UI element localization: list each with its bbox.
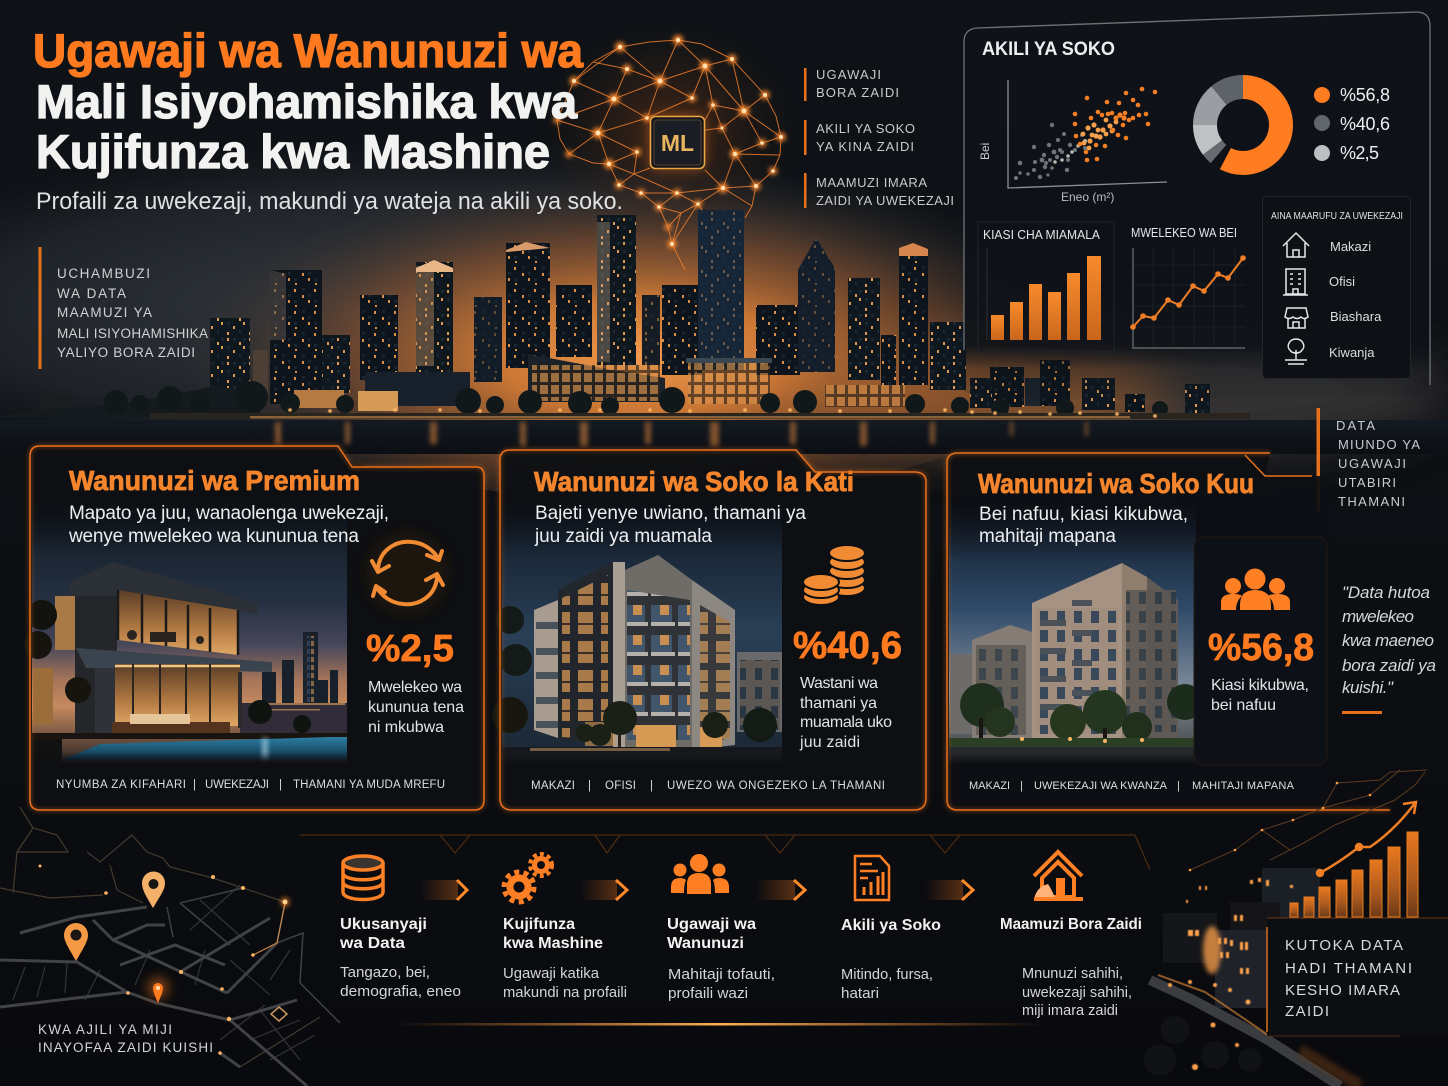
icon: database <box>343 856 383 900</box>
caption: liveable cities <box>38 1022 213 1055</box>
step: machine learning: Kujifunza <box>503 916 575 933</box>
process timeline <box>300 835 1150 1026</box>
panel: investment types: Ofisi <box>1329 274 1355 289</box>
panel: investment types: Kiwanja <box>1329 345 1375 360</box>
card tags <box>531 780 885 792</box>
icon: stacked coins <box>803 545 865 605</box>
callouts: top centre benefits: YA KINA ZAIDI <box>816 139 914 154</box>
card tags: OFISI <box>605 780 636 792</box>
low-rise waterfront buildings <box>294 354 905 411</box>
callout: left data analysis: UCHAMBUZI <box>57 266 150 281</box>
card heading: Wanunuzi wa Premium <box>69 465 360 496</box>
callouts: top centre benefits: UGAWAJI <box>816 67 881 82</box>
image: apartment building <box>492 505 782 764</box>
arrow <box>755 880 805 900</box>
icon: house <box>1034 852 1083 901</box>
step: machine learning: kwa Mashine <box>503 935 603 952</box>
water with reflections <box>0 408 1448 454</box>
quote: "Data hutoa <box>1342 583 1430 602</box>
step: better decisions: Mnunuzi sahihi, <box>1022 966 1123 982</box>
step: market intelligence: hatari <box>841 986 879 1002</box>
card tags: | <box>588 780 591 792</box>
stat description: thamani ya <box>800 695 877 712</box>
stat description: ni mkubwa <box>368 719 444 736</box>
subtitle: Profaili za uwekezaji, makundi ya wateja na akili ya soko. <box>36 188 623 215</box>
card tags <box>969 780 1295 792</box>
line chart: price trend: MWELEKEO WA BEI <box>1131 226 1237 240</box>
step: market intelligence: Mitindo, fursa, <box>841 967 933 983</box>
stat description: Mwelekeo wa <box>368 679 462 696</box>
image: luxury villa at dusk <box>24 505 347 764</box>
stat description: juu zaidi <box>799 734 860 751</box>
step: better decisions <box>1000 852 1142 1019</box>
title: Kujifunza kwa Mashine <box>36 125 550 178</box>
step: data collection <box>339 856 461 1000</box>
callout: left data analysis: MALI ISIYOHAMISHIKA <box>57 326 208 341</box>
callout: left data analysis <box>38 247 208 369</box>
icon: shop <box>1285 308 1308 328</box>
donut legend <box>1314 85 1390 163</box>
callout box: from data to value: ZAIDI <box>1285 1003 1329 1020</box>
icon: location pin <box>142 872 165 908</box>
callout: left data analysis: YALIYO BORA ZAIDI <box>57 345 195 360</box>
step: data collection: wa Data <box>339 935 405 952</box>
line chart: price trend <box>1130 226 1246 348</box>
icon: neural network brain <box>540 20 800 270</box>
icon: group of people <box>1221 568 1290 610</box>
panel: mid-market buyers <box>492 450 926 810</box>
card tags <box>56 779 445 791</box>
stat: %40,6 <box>793 625 902 667</box>
icon: office <box>1283 269 1308 295</box>
stat: %2,5 <box>366 628 454 670</box>
title: Ugawaji wa Wanunuzi wa <box>33 24 584 77</box>
card border <box>30 446 484 810</box>
icon: land plot <box>1285 339 1307 364</box>
panel: investment types <box>1262 196 1410 378</box>
arrow: growth trend <box>1317 802 1416 876</box>
callouts: top centre benefits: ZAIDI YA UWEKEZAJI <box>816 193 954 208</box>
donut chart <box>1205 87 1281 163</box>
card heading: Wanunuzi wa Soko Kuu <box>978 468 1254 499</box>
scatter chart <box>978 80 1167 204</box>
callout box: from data to value: KUTOKA DATA <box>1285 937 1403 954</box>
card description: Bei nafuu, kiasi kikubwa, <box>979 504 1188 525</box>
arrow <box>420 880 467 900</box>
icon: people <box>671 854 729 894</box>
step: machine learning: makundi na profaili <box>503 985 627 1001</box>
step: market intelligence: Akili ya Soko <box>841 917 941 934</box>
card heading: Wanunuzi wa Soko la Kati <box>534 466 854 497</box>
step: better decisions: Maamuzi Bora Zaidi <box>1000 916 1142 933</box>
scatter chart: Eneo (m²) <box>1061 190 1114 204</box>
step: data collection: demografia, eneo <box>340 984 461 1000</box>
step: better decisions: miji imara zaidi <box>1022 1003 1118 1019</box>
step: buyer segmentation: profaili wazi <box>668 986 748 1002</box>
stat description <box>1211 677 1309 714</box>
stat description: Wastani wa <box>800 675 878 692</box>
card description <box>534 503 806 547</box>
panel: market intelligence dashboard <box>964 12 1430 400</box>
stat description <box>368 679 464 736</box>
panel: investment types: Makazi <box>1330 239 1371 254</box>
card tags: UWEKEZAJI WA KWANZA <box>1034 780 1168 792</box>
icon: house <box>1283 233 1309 257</box>
icon: location pin <box>64 923 88 961</box>
buildings <box>1163 868 1320 1008</box>
callouts: top centre benefits <box>804 67 954 208</box>
heading: market intelligence: AKILI YA SOKO <box>982 39 1115 60</box>
donut legend: %56,8 <box>1340 85 1390 105</box>
quote: bora zaidi ya <box>1342 656 1436 675</box>
bar chart: growth <box>1290 832 1418 917</box>
card tags: | <box>193 779 196 791</box>
card description <box>68 503 389 547</box>
card tags: THAMANI YA MUDA MREFU <box>293 779 445 791</box>
callout box: from data to value <box>1267 918 1448 1036</box>
bottom right: night city with growth chart <box>1144 770 1448 1086</box>
card description: Bajeti yenye uwiano, thamani ya <box>535 503 806 524</box>
card tags: MAKAZI <box>531 780 575 792</box>
trees along the shore <box>104 381 1168 417</box>
stat description: Kiasi kikubwa, <box>1211 677 1309 694</box>
quote: mwelekeo <box>1342 607 1414 626</box>
card tags: UWEKEZAJI <box>205 779 269 791</box>
card tags: | <box>279 779 282 791</box>
buildings <box>0 210 1210 418</box>
panel: premium buyers <box>24 446 484 810</box>
stat: %56,8 <box>1208 627 1314 669</box>
stat description: bei nafuu <box>1211 697 1276 714</box>
card description: Mapato ya juu, wanaolenga uwekezaji, <box>69 503 389 524</box>
callouts: top centre benefits: AKILI YA SOKO <box>816 121 915 136</box>
step: market intelligence <box>841 856 941 1002</box>
stat description: muamala uko <box>800 714 892 731</box>
icon: ML chip: ML <box>661 130 694 156</box>
card tags: | <box>650 780 653 792</box>
card tags: NYUMBA ZA KIFAHARI <box>56 779 186 791</box>
callout: data segmentation: UTABIRI <box>1338 475 1396 490</box>
caption: liveable cities: INAYOFAA ZAIDI KUISHI <box>38 1040 213 1055</box>
bar chart: transaction volume <box>978 222 1114 352</box>
icon: repeat arrows <box>365 531 449 615</box>
card border <box>947 453 1390 810</box>
panel: mass-market buyers <box>947 453 1390 810</box>
callout: data segmentation: DATA <box>1336 418 1375 433</box>
icon: location pin <box>148 978 168 1003</box>
callout box: from data to value: HADI THAMANI <box>1285 960 1412 977</box>
step: data collection: Tangazo, bei, <box>340 965 430 981</box>
step: buyer segmentation: Wanunuzi <box>667 935 744 952</box>
card border <box>500 450 926 810</box>
donut legend: %2,5 <box>1340 143 1379 163</box>
arrow <box>580 880 627 900</box>
bar chart: transaction volume: KIASI CHA MIAMALA <box>983 228 1101 242</box>
callout: data segmentation: MIUNDO YA <box>1338 437 1420 452</box>
scatter chart: Bei <box>978 143 992 160</box>
callout box: from data to value: KESHO IMARA <box>1285 982 1400 999</box>
step: better decisions: uwekezaji sahihi, <box>1022 985 1132 1001</box>
panel: stat background <box>1194 537 1327 765</box>
step: buyer segmentation: Ugawaji wa <box>667 916 756 933</box>
card tags: UWEZO WA ONGEZEKO LA THAMANI <box>667 780 885 792</box>
card description: wenye mwelekeo wa kununua tena <box>68 526 359 547</box>
card tags: MAHITAJI MAPANA <box>1192 780 1295 792</box>
icon: report document <box>855 856 889 900</box>
panel: investment types: Biashara <box>1330 309 1382 324</box>
caption: liveable cities: KWA AJILI YA MIJI <box>38 1022 172 1037</box>
card tags: | <box>1177 780 1180 792</box>
card description <box>979 504 1188 547</box>
card description: mahitaji mapana <box>979 526 1116 547</box>
title: Mali Isiyohamishika kwa <box>36 75 578 128</box>
card description: juu zaidi ya muamala <box>534 526 712 547</box>
callouts: top centre benefits: BORA ZAIDI <box>816 85 899 100</box>
map: city streets with location pins <box>0 807 340 1086</box>
panel: investment types: AINA MAARUFU ZA UWEKEZAJI <box>1271 210 1403 222</box>
stat description <box>799 675 892 751</box>
callout: data segmentation <box>1316 408 1420 511</box>
callout: data segmentation: THAMANI <box>1338 494 1405 509</box>
quote: kuishi." <box>1342 678 1394 697</box>
image: mid-rise apartments with trees <box>949 505 1203 764</box>
card tags: MAKAZI <box>969 780 1010 792</box>
road with street lights <box>1144 975 1360 1086</box>
step: machine learning <box>503 854 627 1001</box>
icon: gears <box>504 854 552 902</box>
step: buyer segmentation <box>667 854 775 1002</box>
quote: kwa maeneo <box>1342 631 1434 650</box>
callout: left data analysis: WA DATA <box>57 286 126 301</box>
hero: city skyline at dusk <box>0 20 1448 500</box>
stat description: kununua tena <box>368 699 464 716</box>
donut legend: %40,6 <box>1340 114 1390 134</box>
step: data collection: Ukusanyaji <box>340 916 427 933</box>
card tags: | <box>1020 780 1023 792</box>
step: machine learning: Ugawaji katika <box>503 966 600 982</box>
quote <box>1342 583 1436 714</box>
step: buyer segmentation: Mahitaji tofauti, <box>668 967 775 983</box>
title <box>33 24 584 178</box>
callout: data segmentation: UGAWAJI <box>1338 456 1406 471</box>
callouts: top centre benefits: MAAMUZI IMARA <box>816 175 927 190</box>
callout: left data analysis: MAAMUZI YA <box>57 305 152 320</box>
arrow <box>925 880 973 900</box>
icon: ML chip <box>650 116 705 169</box>
